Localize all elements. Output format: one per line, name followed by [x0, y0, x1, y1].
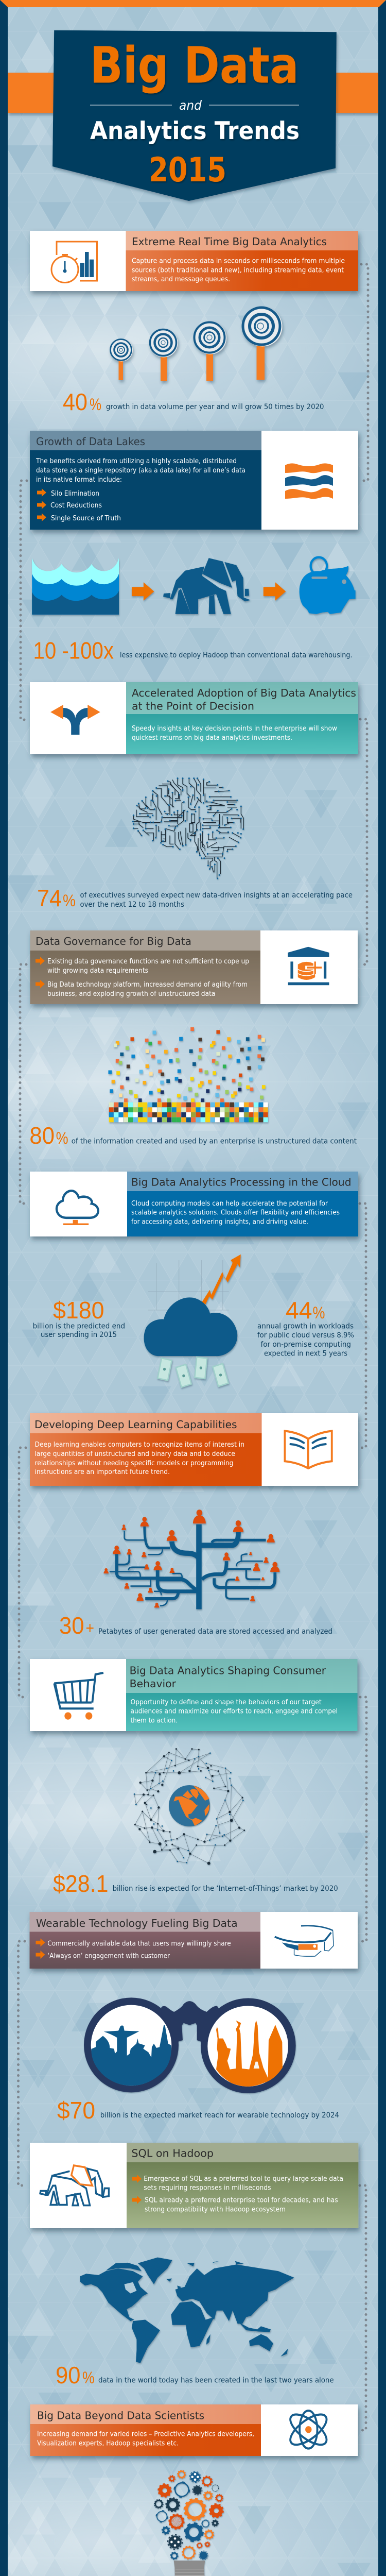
body text — [37, 2431, 254, 2447]
heading: Big Data Analytics Processing in the Cloud — [131, 1176, 351, 1188]
dotted connector: right 5 — [360, 2185, 366, 2430]
dotted connector: right 2 — [360, 719, 367, 964]
body text: Speedy insights at key decision points in the enterprise will show — [132, 725, 337, 733]
stat: 80% — [29, 1122, 357, 1149]
bullets: Cost Reductions — [50, 502, 102, 510]
stat: 44%: % — [313, 1303, 325, 1322]
stat: 74%: of executives surveyed expect new data-driven insights at an accelerating pace — [80, 891, 353, 900]
body text — [35, 1441, 244, 1476]
body text: quickest returns on big data analytics investments. — [132, 734, 292, 742]
bullets — [132, 2175, 343, 2213]
stat: 10-100x: 10 -100x — [33, 637, 114, 664]
icon: hadoop elephant outline — [40, 2165, 109, 2206]
stat: 74%: % — [63, 891, 76, 910]
body text: streams, and message queues. — [132, 276, 230, 283]
stat: 44%: expected in next 5 years — [264, 1350, 347, 1358]
body text — [131, 1699, 338, 1724]
stat: 40%: 40 — [63, 388, 87, 415]
stat: 40% — [63, 388, 324, 415]
panel: beyond data scientists — [30, 2404, 358, 2456]
illustration: gear light bulb — [154, 2470, 223, 2576]
stat: 90%: 90 — [56, 2362, 80, 2388]
bullets: sets requiring responses in milliseconds — [144, 2184, 271, 2192]
water — [32, 558, 119, 615]
title ribbon stripes — [8, 73, 378, 113]
right skyline — [216, 2020, 283, 2087]
heading: Extreme Real Time Big Data Analytics — [132, 235, 327, 248]
heading: Wearable Technology Fueling Big Data — [36, 1917, 238, 1929]
icon: smart glasses — [275, 1926, 334, 1956]
body text: Visualization experts, Hadoop specialists etc. — [37, 2439, 179, 2447]
bullets: ‘Always on’ engagement with customer — [47, 1953, 170, 1960]
icon: shopping cart — [54, 1673, 103, 1720]
icon: bank with database — [288, 947, 329, 985]
gears — [154, 2470, 223, 2560]
illustration: scattered data pixels — [110, 1029, 266, 1120]
stat: 30+: + — [85, 1619, 94, 1637]
illustration: money cloud with growth arrow — [144, 1255, 241, 1387]
bullets: with growing data requirements — [47, 967, 148, 975]
title rules — [90, 105, 299, 106]
bulb base — [174, 2561, 205, 2576]
dotted connector: left 2 — [20, 964, 26, 1204]
stat: $180: billion is the predicted end — [33, 1323, 125, 1331]
stat: 44%: for on-premise computing — [260, 1341, 351, 1349]
right lens — [207, 2006, 288, 2087]
dotted connector: right 1 — [361, 264, 368, 481]
arrow — [264, 582, 286, 601]
stat: 90% — [56, 2362, 334, 2388]
heading: Data Governance for Big Data — [36, 935, 191, 947]
heading: Growth of Data Lakes — [36, 435, 145, 448]
stat: 30+: 30 — [59, 1612, 84, 1639]
stat: 74% — [37, 885, 353, 911]
chart: lollipop growth — [110, 307, 282, 381]
stat: 90%: % — [82, 2368, 95, 2387]
piggy bank — [300, 557, 356, 614]
panel: cloud processing — [30, 1172, 358, 1236]
left skyline — [91, 2025, 171, 2086]
body text: large quantities of unstructured and binary data and to deduce — [35, 1450, 235, 1458]
stat: 80%: % — [56, 1129, 68, 1147]
illustration: world map — [80, 2258, 294, 2363]
bullets: Silo Elimination — [51, 490, 99, 498]
heading: Developing Deep Learning Capabilities — [34, 1418, 237, 1431]
stat: 30+: Petabytes of user generated data are stored accessed and analyzed — [98, 1628, 332, 1636]
network — [134, 1749, 244, 1863]
illustration: people tree — [103, 1510, 279, 1609]
frame — [84, 1997, 296, 2093]
body text — [132, 725, 337, 742]
body text: data store as a single repository (aka a data lake) for all one’s data — [36, 467, 245, 474]
body text: Capture and process data in seconds or milliseconds from multiple — [132, 258, 345, 265]
illustration: network around globe — [134, 1749, 244, 1863]
heading: Big Data Beyond Data Scientists — [37, 2409, 204, 2421]
dotted connector: right 4 — [360, 1697, 366, 1941]
title: 2015: 2015 — [149, 151, 226, 190]
stat: $180: user spending in 2015 — [41, 1331, 117, 1339]
dotted connector: left 4 — [19, 1941, 25, 2185]
icon: open book — [285, 1431, 332, 1468]
stat: 74%: over the next 12 to 18 months — [80, 901, 184, 909]
stat: $70 — [57, 2097, 339, 2124]
title: and: and — [179, 98, 202, 113]
heading: Behavior — [130, 1677, 177, 1690]
body text: them to action. — [131, 1717, 178, 1724]
bullets: strong compatibility with Hadoop ecosystem — [145, 2206, 286, 2213]
dotted connector: left 1 — [21, 481, 27, 720]
illustration: circuit brain — [133, 778, 243, 878]
stat: 44%: for public cloud versus 8.9% — [257, 1331, 354, 1340]
bullets: Commercially available data that users may willingly share — [47, 1940, 231, 1947]
bullets: Single Source of Truth — [51, 515, 121, 522]
stat: 44% — [257, 1297, 354, 1358]
bullets: Emergence of SQL as a preferred tool to query large scale data — [144, 2175, 343, 2183]
stat: 30+ — [59, 1612, 332, 1639]
stat: $28.1 — [53, 1870, 338, 1897]
arrow — [132, 582, 154, 601]
illustration: binoculars with landmarks — [84, 1997, 296, 2093]
bullets: SQL already a preferred enterprise tool for decades, and has — [145, 2197, 338, 2204]
stat: $28.1: billion rise is expected for the ‘Internet-of-Things’ market by 2020 — [113, 1885, 338, 1893]
elephant — [163, 558, 251, 614]
bullets — [36, 1938, 231, 1960]
stat: 40%: % — [90, 395, 101, 414]
illustration: lake, elephant, piggy bank — [32, 557, 356, 615]
panel: data governance — [30, 930, 358, 1004]
title banner — [52, 30, 337, 201]
body text: in its native format include: — [36, 476, 122, 484]
stat: 80%: 80 — [29, 1122, 55, 1149]
stat: $180 — [33, 1297, 125, 1339]
icon: waves — [285, 463, 333, 499]
stat: $70: billion is the expected market reach for wearable technology by 2024 — [100, 2111, 339, 2120]
stat: 10-100x: less expensive to deploy Hadoop than conventional data warehousing. — [120, 651, 352, 659]
body text — [131, 1200, 340, 1226]
bullets: business, and exploding growth of unstructured data — [47, 990, 215, 998]
heading — [132, 687, 356, 712]
bullets — [37, 488, 121, 522]
panel: accelerated adoption — [30, 682, 358, 754]
body text: for accessing data, delivering insights, and driving value. — [131, 1218, 308, 1226]
bullets — [36, 957, 249, 998]
panel: sql on hadoop — [30, 2143, 358, 2228]
body text: The benefits derived from utilizing a highly scalable, distributed — [36, 457, 237, 465]
body text: Deep learning enables computers to recognize items of interest in — [35, 1441, 244, 1449]
dotted connector: left 3 — [19, 1448, 26, 1697]
panel: deep learning — [30, 1413, 358, 1486]
panel: consumer behavior — [30, 1659, 357, 1731]
heading — [130, 1664, 326, 1690]
bullets: Big Data technology platform, increased demand of agility from — [47, 981, 248, 989]
body text: instructions are an important future trend. — [35, 1468, 170, 1476]
panel: growth of data lakes — [30, 431, 358, 530]
orange top bar — [0, 0, 386, 7]
dotted connector: right 3 — [360, 1204, 366, 1448]
body text: Increasing demand for varied roles – Predictive Analytics developers, — [37, 2431, 254, 2438]
stat: $70: $70 — [57, 2097, 95, 2124]
stat: $180: $180 — [53, 1297, 104, 1324]
body text: scalable analytics solutions. Clouds offer flexibility and efficiencies — [131, 1209, 340, 1217]
stat: $28.1: $28.1 — [53, 1870, 108, 1897]
title: Big Data: Big Data — [90, 37, 299, 95]
panel: extreme real time — [30, 231, 358, 291]
bullets: Existing data governance functions are not sufficient to cope up — [47, 958, 249, 965]
left lens — [91, 2005, 171, 2086]
heading: at the Point of Decision — [132, 700, 254, 712]
icon: stopwatch and chart — [51, 242, 97, 283]
heading: Accelerated Adoption of Big Data Analytics — [132, 687, 356, 699]
body text: Cloud computing models can help accelerate the potential for — [131, 1200, 328, 1208]
panel: wearable technology — [30, 1912, 358, 1969]
icon: atom — [286, 2409, 331, 2450]
stat: 90%: data in the world today has been created in the last two years alone — [98, 2376, 334, 2384]
stat: 40%: growth in data volume per year and will grow 50 times by 2020 — [106, 403, 324, 411]
body text — [132, 258, 345, 283]
body text: Opportunity to define and shape the behaviors of our target — [131, 1699, 322, 1706]
body text — [36, 457, 245, 484]
stat: 80%: of the information created and used by an enterprise is unstructured data content — [72, 1137, 357, 1145]
icon: cloud network — [57, 1191, 98, 1225]
title: Analytics Trends: Analytics Trends — [90, 117, 300, 145]
stat: 44%: annual growth in workloads — [257, 1323, 354, 1331]
body text: audiences and maximize our efforts to reach, engage and compel — [131, 1707, 338, 1716]
body text: relationships without needing specific models or programming — [35, 1460, 234, 1467]
stat: 10-100x — [33, 637, 352, 664]
stat: 44%: 44 — [286, 1297, 312, 1324]
heading: SQL on Hadoop — [131, 2147, 214, 2160]
body text: sources (both traditional and new), including streaming data, event — [132, 267, 344, 275]
globe — [169, 1785, 210, 1826]
heading: Big Data Analytics Shaping Consumer — [130, 1664, 326, 1676]
icon: fork arrows — [50, 705, 100, 735]
stat: 74%: 74 — [37, 885, 62, 911]
